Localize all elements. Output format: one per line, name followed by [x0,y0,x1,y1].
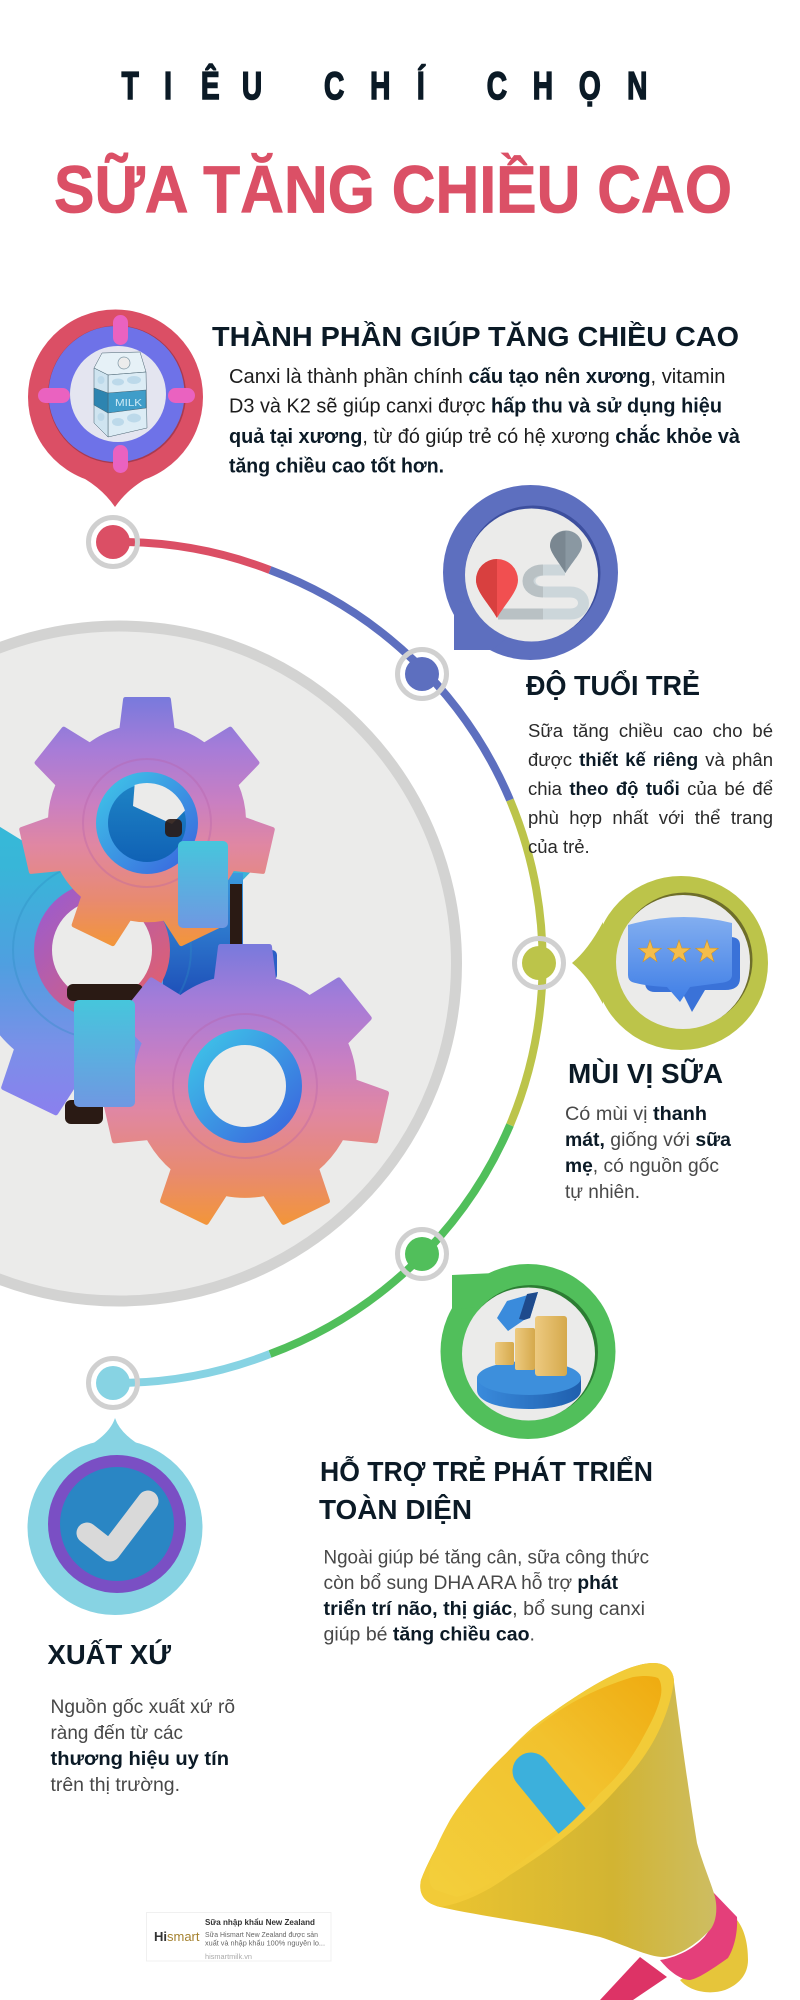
icon: milk carton pin [28,310,203,507]
artifact: dark patches [65,884,242,1124]
illustration: gears [0,700,386,1222]
icon: milk carton pin: MILK [115,397,142,409]
icon: rating speech bubble [572,876,768,1050]
panel: big gear circle [0,626,456,1301]
text: thành phần body: tăng chiều cao tốt hơn. [229,456,444,478]
text: mùi vị body: mẹ, có nguồn gốc [565,1156,719,1177]
text: xuất xứ body [50,1697,235,1796]
text: xuất xứ body: Nguồn gốc xuất xứ rõ [50,1697,235,1718]
panel: blue rectangle upper [178,841,228,928]
text: độ tuổi body: Sữa tăng chiều cao cho bé [528,720,773,741]
text: độ tuổi body: phù hợp nhất với thể trang [528,807,773,828]
title: sữa tăng chiều cao: SỮA TĂNG CHIỀU CAO [54,152,732,228]
illustration: megaphone [420,1663,748,2000]
text: hỗ trợ body: triển trí não, thị giác , bổ sung canxi [324,1599,645,1620]
text: hỗ trợ body: còn bổ sung DHA ARA hỗ trợ phát [324,1572,619,1594]
gear: bottom [104,947,386,1222]
card: hismart ad: xuất và nhập khẩu 100% nguyên lo... [205,1938,325,1948]
card: hismart ad: Hismart [154,1929,200,1944]
text: xuất xứ body: thương hiệu uy tín [50,1749,229,1770]
heading: hỗ trợ trẻ: TOÀN DIỆN [319,1494,472,1525]
text: độ tuổi body [528,720,773,857]
heading: độ tuổi trẻ: ĐỘ TUỔI TRẺ [526,669,700,701]
text: hỗ trợ body [324,1548,649,1646]
card: hismart ad: hismartmilk.vn [205,1952,252,1961]
title: tiêu chí chọn: TIÊUCHÍCHỌN [122,65,647,108]
node 1 [88,518,138,566]
node 2 [398,650,446,698]
text: độ tuổi body: chia theo độ tuổi của bé để [528,778,773,799]
node 5 [88,1358,138,1408]
heading: mùi vị sữa: MÙI VỊ SỮA [568,1058,723,1089]
text: thành phần body [229,366,741,478]
text: mùi vị body: tự nhiên. [565,1182,640,1203]
text: độ tuổi body: của trẻ. [528,836,590,857]
text: độ tuổi body: được thiết kế riêng và phân [528,749,773,770]
panel: blue rectangle lower [74,1000,135,1107]
text: xuất xứ body: ràng đến từ các [50,1723,183,1744]
text: mùi vị body: Có mùi vị thanh [565,1104,707,1125]
text: thành phần body: Canxi là thành phần chính cấu tạo nên xương, vitamin [229,366,726,388]
timeline arc [113,542,543,1383]
text: xuất xứ body: trên thị trường. [50,1775,180,1796]
text: mùi vị body: mát, giống với sữa [565,1130,731,1151]
text: hỗ trợ body: Ngoài giúp bé tăng cân, sữa công thức [324,1548,649,1568]
icon: growth chart bubble [440,1264,616,1439]
icon: route map bubble [443,485,618,660]
node 4 [398,1230,446,1278]
heading: hỗ trợ trẻ [319,1455,653,1525]
text: hỗ trợ body: giúp bé tăng chiều cao. [324,1624,535,1646]
card: hismart ad: Sữa Hismart New Zealand được sản [205,1930,318,1939]
text: thành phần body: quả tại xương, từ đó giúp trẻ có hệ xương chắc khỏe và [229,424,741,448]
text: thành phần body: D3 và K2 sẽ giúp canxi được hấp thu và sử dụng hiệu [229,396,722,418]
heading: thành phần: THÀNH PHẦN GIÚP TĂNG CHIỀU CAO [212,321,739,352]
text: mùi vị body [565,1104,731,1203]
gear: top [22,700,272,944]
gear: back blue [0,827,277,1116]
heading: xuất xứ: XUẤT XỨ [48,1639,172,1670]
icon: check mark pin [28,1418,202,1615]
node 3 [514,938,564,988]
heading: hỗ trợ trẻ: HỖ TRỢ TRẺ PHÁT TRIỂN [320,1455,653,1487]
card: hismart ad: Sữa nhập khẩu New Zealand [205,1917,315,1927]
card: hismart ad [146,1912,331,1961]
